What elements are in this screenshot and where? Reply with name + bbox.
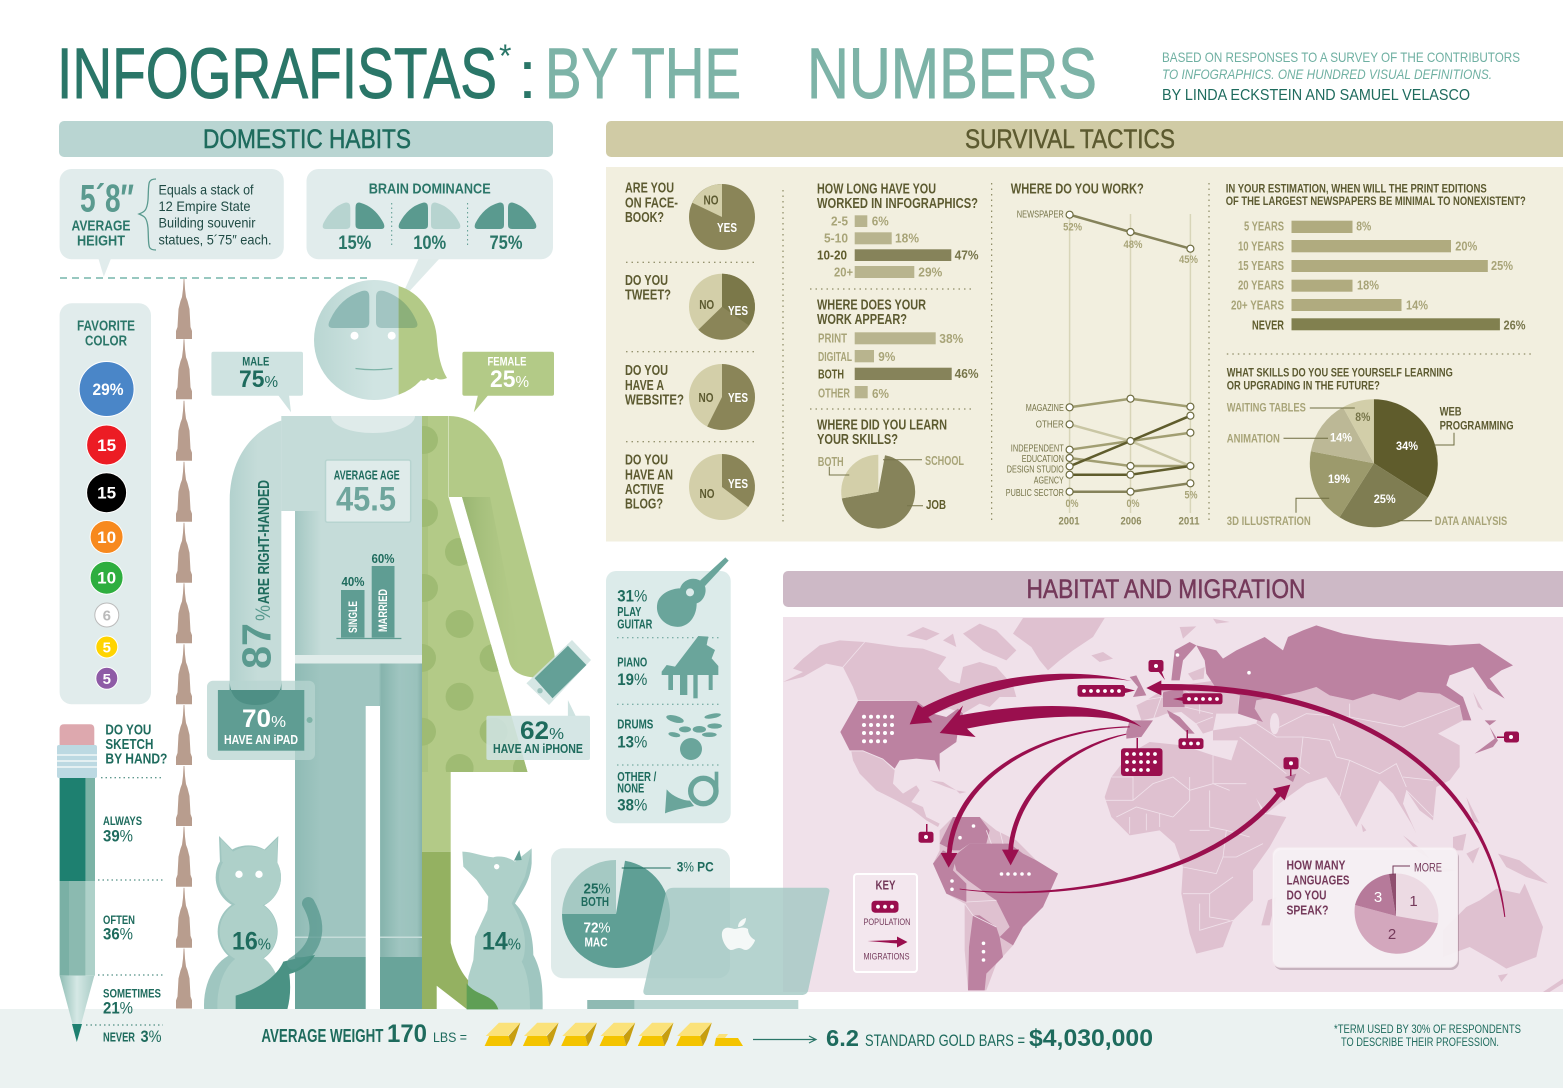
highlighted countries: [840, 625, 1513, 990]
bar chart: where work appears: BOTH: [818, 368, 844, 382]
question: website: DO YOU: [625, 363, 668, 379]
map key: POPULATION: [864, 917, 911, 928]
heading: domestic habits: [59, 121, 553, 157]
heading: domestic habits: DOMESTIC HABITS: [203, 124, 411, 154]
title: *: [499, 38, 511, 74]
height dashed line: [60, 277, 370, 279]
panel: height: [60, 169, 284, 277]
pie chart: future skills: WHAT SKILLS DO YOU SEE YOURSELF LEARNING: [1227, 366, 1453, 380]
panel: favorite color: 15: [97, 484, 116, 503]
inset: languages: SPEAK?: [1286, 903, 1329, 918]
iPhone: 62%: [520, 717, 564, 745]
footnote: *TERM USED BY 30% OF RESPONDENTS: [1334, 1024, 1521, 1036]
subtitle and byline: BY LINDA ECKSTEIN AND SAMUEL VELASCO: [1162, 87, 1470, 104]
bar chart: print editions: 8%: [1356, 219, 1371, 233]
female leg: [422, 772, 498, 1009]
panel: favorite color: 5: [103, 640, 111, 656]
shirt shadow: [295, 511, 321, 655]
line chart: where do you work: DESIGN STUDIO: [1007, 465, 1064, 476]
bar chart: where work appears: 9%: [878, 349, 896, 364]
neckline: [331, 416, 415, 433]
bar chart: years in infographics: 20+: [834, 264, 853, 280]
iPad: [207, 680, 315, 760]
pie chart: where skills learned: WHERE DID YOU LEARN: [817, 417, 947, 433]
cat front: [218, 839, 281, 1009]
weight in gold bars: AVERAGE WEIGHT: [261, 1026, 383, 1046]
arm gap: [281, 511, 295, 681]
panel: favorite color: 10: [97, 528, 116, 547]
inset: languages: 3: [1374, 889, 1382, 906]
question: facebook: [625, 181, 755, 250]
panel: height: 12 Empire State: [158, 198, 251, 214]
panel: survival tactics: [606, 167, 1563, 542]
inset: languages: [1272, 847, 1459, 970]
pencil: sketch by hand: [57, 721, 167, 1046]
panel: favorite color: COLOR: [85, 333, 127, 349]
arrow: [753, 1036, 816, 1043]
question: blog: NO: [700, 486, 714, 501]
marker: Japan: [1497, 732, 1519, 742]
pie chart: where skills learned: YOUR SKILLS?: [817, 432, 898, 448]
bar chart: print editions: 20+ YEARS: [1231, 298, 1284, 312]
pencil: sketch by hand: DO YOU: [105, 721, 151, 738]
bar chart: where work appears: DIGITAL: [818, 350, 852, 364]
female arm: [449, 416, 555, 678]
pencil: sketch by hand: BY HAND?: [105, 751, 167, 768]
icon: french horn: [665, 772, 718, 813]
line chart: where do you work: 0%: [1066, 498, 1079, 510]
bar chart: print editions: 26%: [1504, 318, 1526, 332]
bar chart: print editions: 14%: [1406, 298, 1428, 312]
question: website: YES: [728, 390, 748, 405]
panel: favorite color: 5: [103, 671, 111, 688]
text: right-handed: 87: [234, 623, 280, 669]
bar chart: years in infographics: 10-20: [817, 248, 847, 262]
bar chart: where work appears: OTHER: [818, 386, 850, 400]
bar chart: married status: SINGLE: [346, 601, 360, 633]
panel: mac vs pc: 25%: [584, 880, 610, 897]
weight in gold bars: LBS =: [433, 1030, 467, 1045]
icon: guitar: [657, 557, 729, 627]
panel: height: Building souvenir: [158, 215, 256, 231]
question: website: WEBSITE?: [625, 393, 684, 409]
icon: drums: [665, 712, 722, 760]
callout: average age: 45.5: [336, 481, 396, 519]
pie chart: future skills: 25%: [1374, 492, 1396, 506]
bar chart: print editions: NEVER: [1252, 318, 1284, 332]
question: facebook: BOOK?: [625, 210, 664, 226]
heading: survival tactics: [606, 121, 1563, 157]
question: facebook: ARE YOU: [625, 181, 674, 197]
bar chart: print editions: IN YOUR ESTIMATION, WHEN WILL THE PRINT EDITIONS: [1226, 181, 1487, 195]
bar chart: years in infographics: 6%: [872, 214, 889, 228]
bar chart: print editions: 18%: [1357, 279, 1379, 293]
polka dots: [422, 426, 528, 772]
bar chart: years in infographics: 18%: [895, 230, 919, 246]
panel: brain dominance: 10%: [413, 233, 446, 254]
pie chart: future skills: DATA ANALYSIS: [1435, 514, 1507, 528]
panel: instruments: NONE: [617, 781, 644, 795]
bar chart: print editions: 10 YEARS: [1238, 239, 1284, 253]
population dots on countries: [862, 653, 1251, 962]
pie chart: where skills learned: JOB: [926, 498, 946, 512]
subtitle and byline: TO INFOGRAPHICS. ONE HUNDRED VISUAL DEFINITIONS.: [1162, 66, 1492, 82]
panel: favorite color: 29%: [92, 380, 124, 399]
inset: languages: MORE: [1414, 861, 1442, 875]
male pants: [295, 664, 422, 1009]
pie chart: where skills learned: [817, 417, 964, 529]
bar chart: print editions: 20%: [1455, 239, 1477, 253]
bar chart: married status: 40%: [342, 575, 364, 589]
map land: [783, 618, 1563, 992]
line chart: where do you work: OTHER: [1036, 419, 1064, 430]
line chart: where do you work: [1006, 181, 1200, 528]
marker: Italy: [1178, 730, 1204, 749]
question: blog: [625, 452, 755, 520]
line chart: where do you work: EDUCATION: [1022, 454, 1064, 465]
question: website: HAVE A: [625, 378, 664, 394]
bottom band: [0, 1009, 1563, 1088]
dog: [462, 848, 543, 1009]
pencil: sketch by hand: OFTEN: [103, 913, 135, 927]
question: facebook: NO: [704, 192, 718, 208]
bar chart: years in infographics: 5-10: [824, 230, 848, 246]
panel: instruments: DRUMS: [617, 717, 653, 731]
line chart: where do you work: 2011: [1178, 516, 1200, 528]
inset: languages: DO YOU: [1286, 887, 1326, 902]
iPhone: HAVE AN iPHONE: [493, 741, 583, 756]
pie chart: future skills: WEB: [1440, 405, 1462, 419]
panel: instruments: 31%: [617, 587, 647, 606]
question: facebook: YES: [717, 220, 737, 235]
map key: KEY: [876, 878, 896, 892]
map markers: [862, 653, 1519, 962]
inland sea: [1225, 718, 1255, 726]
callout: female: [462, 352, 554, 412]
arm shadow: [462, 497, 525, 676]
panel: instruments: PIANO: [617, 656, 648, 670]
cat: [204, 836, 322, 1009]
bar chart: where work appears: 38%: [939, 331, 964, 346]
iPhone: [486, 640, 591, 760]
heading: habitat and migration: HABITAT AND MIGRATION: [1026, 574, 1306, 604]
dotted separators: [626, 183, 1531, 522]
weight in gold bars: [261, 1020, 1153, 1052]
weight in gold bars: $4,030,000: [1029, 1025, 1153, 1052]
male arm: [230, 416, 310, 705]
title: BY THE: [545, 35, 741, 114]
callout: male: MALE: [242, 355, 269, 369]
bar chart: print editions: 20 YEARS: [1238, 279, 1284, 293]
bar chart: years in infographics: WORKED IN INFOGRAPHICS?: [817, 196, 978, 212]
icon: apple logo: [722, 918, 755, 950]
panel: height: 5´8″: [80, 178, 134, 221]
panel: mac vs pc: 3% PC: [677, 859, 714, 875]
panel: brain dominance: 75%: [490, 233, 523, 254]
line chart: where do you work: INDEPENDENT: [1011, 443, 1064, 454]
question: tweet: [625, 273, 755, 340]
question: blog: BLOG?: [625, 497, 663, 513]
inset: languages: 2: [1388, 926, 1396, 943]
pie chart: future skills: WAITING TABLES: [1227, 401, 1306, 415]
weight in gold bars: 6.2: [826, 1025, 859, 1051]
panel: favorite color: 15: [97, 436, 116, 455]
line chart: where do you work: NEWSPAPER: [1017, 210, 1064, 220]
line chart: where do you work: MAGAZINE: [1026, 403, 1064, 414]
pie chart: where skills learned: BOTH: [818, 455, 844, 469]
icon: piano: [662, 636, 718, 698]
question: blog: HAVE AN: [625, 467, 673, 483]
panel: brain dominance: BRAIN DOMINANCE: [369, 180, 491, 197]
pie chart: future skills: PROGRAMMING: [1440, 418, 1514, 432]
marker: Spain: [1121, 738, 1162, 776]
country borders: [843, 642, 1460, 930]
line chart: where do you work: 48%: [1124, 239, 1143, 251]
iPad: HAVE AN iPAD: [224, 732, 298, 747]
pencil: sketch by hand: 39%: [103, 827, 133, 846]
bar chart: where work appears: PRINT: [818, 332, 847, 346]
callout: male: [211, 352, 303, 412]
line chart: where do you work: WHERE DO YOU WORK?: [1011, 181, 1144, 197]
heading: habitat and migration: [783, 571, 1563, 607]
question: website: NO: [698, 390, 714, 405]
panel: instruments: GUITAR: [617, 617, 652, 631]
bar chart: years in infographics: 47%: [955, 248, 979, 262]
question: facebook: ON FACE-: [625, 195, 678, 211]
title: :: [518, 37, 537, 113]
bar chart: married status: MARRIED: [376, 589, 390, 632]
panel: favorite color: FAVORITE: [77, 319, 135, 335]
pencil: sketch by hand: 3%: [140, 1027, 162, 1046]
callout: average age: AVERAGE AGE: [334, 468, 400, 482]
dog: 14%: [482, 928, 521, 956]
bar chart: where work appears: 46%: [955, 366, 979, 381]
title: INFOGRAFISTAS: [57, 35, 497, 114]
pencil: sketch by hand: 21%: [103, 998, 133, 1017]
map key: [854, 874, 917, 972]
question: tweet: DO YOU: [625, 273, 668, 289]
panel: brain dominance: [306, 169, 553, 303]
line chart: where do you work: AGENCY: [1034, 475, 1064, 486]
bar chart: print editions: 25%: [1491, 259, 1513, 273]
statues of empire state building: [176, 279, 192, 1008]
footnote: [1334, 1024, 1521, 1049]
pencil: sketch by hand: ALWAYS: [103, 814, 142, 828]
weight in gold bars: STANDARD GOLD BARS =: [865, 1032, 1025, 1050]
map key: MIGRATIONS: [864, 952, 910, 962]
text: right-handed: %: [252, 605, 275, 621]
bar chart: where work appears: [817, 297, 979, 401]
line chart: where do you work: 2001: [1058, 516, 1080, 528]
pie chart: future skills: 34%: [1396, 439, 1418, 453]
question: tweet: NO: [699, 297, 714, 312]
panel: height: HEIGHT: [77, 232, 125, 249]
panel: height: statues, 5´75″ each.: [158, 231, 272, 247]
question: blog: DO YOU: [625, 452, 668, 468]
footnote: TO DESCRIBE THEIR PROFESSION.: [1341, 1037, 1499, 1049]
bar chart: where work appears: WORK APPEAR?: [817, 312, 907, 328]
heading: survival tactics: SURVIVAL TACTICS: [965, 124, 1175, 154]
panel: height: AVERAGE: [72, 218, 130, 235]
panel: mac vs pc: [551, 848, 730, 978]
panel: instruments: 19%: [617, 670, 647, 689]
pencil: sketch by hand: NEVER: [103, 1031, 135, 1045]
head: [314, 280, 447, 400]
panel: favorite color: 6: [103, 608, 111, 624]
inset: languages: 1: [1409, 893, 1418, 910]
cat silhouette: [204, 836, 281, 1009]
question: tweet: TWEET?: [625, 288, 671, 304]
panel: mac vs pc: 72%: [584, 920, 610, 937]
bar chart: where work appears: 6%: [872, 386, 889, 401]
question: tweet: YES: [728, 303, 748, 318]
line chart: where do you work: 5%: [1184, 490, 1198, 502]
panel: instruments: 38%: [617, 796, 647, 815]
panel: mac vs pc: MAC: [584, 935, 608, 950]
laptop: [587, 888, 830, 1009]
pie chart: future skills: 14%: [1330, 430, 1352, 444]
panel: favorite color: [60, 303, 151, 704]
inset: languages: LANGUAGES: [1286, 872, 1350, 887]
bar chart: years in infographics: 29%: [918, 264, 943, 280]
bar chart: print editions: [1226, 181, 1526, 332]
question: blog: YES: [728, 476, 748, 491]
title: [57, 35, 1097, 114]
text: right-handed: ARE RIGHT-HANDED: [256, 480, 273, 604]
bar chart: years in infographics: 2-5: [831, 214, 848, 228]
marker: UK: [1078, 685, 1135, 697]
belt: [295, 655, 422, 664]
panel: instruments: OTHER /: [617, 770, 657, 784]
bar chart: where work appears: WHERE DOES YOUR: [817, 297, 926, 313]
pie chart: future skills: [1227, 366, 1514, 528]
panel: height: Equals a stack of: [158, 181, 254, 197]
pencil: sketch by hand: SKETCH: [105, 736, 153, 753]
male shirt: [281, 416, 422, 655]
female dress: [422, 416, 528, 772]
panel: favorite color: 10: [97, 569, 116, 588]
pencil: sketch by hand: SOMETIMES: [103, 986, 161, 1000]
callout: average age: [326, 460, 411, 522]
subtitle and byline: [1162, 49, 1520, 104]
pie chart: future skills: OR UPGRADING IN THE FUTURE?: [1227, 378, 1380, 392]
text: right-handed: [234, 480, 280, 669]
marker: Arabia: [1284, 757, 1298, 776]
panel: instruments: [606, 557, 731, 823]
bar chart: married status: [336, 552, 401, 638]
icon: gold bars: [485, 1023, 743, 1046]
title: NUMBERS: [807, 35, 1097, 114]
panel: brain dominance: 15%: [338, 233, 371, 254]
marker: Norway: [1148, 660, 1165, 680]
line chart: where do you work: 2006: [1120, 516, 1142, 528]
bar chart: married status: 60%: [372, 552, 394, 566]
pie chart: future skills: 8%: [1355, 410, 1371, 424]
panel: instruments: PLAY: [617, 605, 642, 619]
figure: person: [207, 280, 591, 1009]
pie chart: future skills: 19%: [1328, 472, 1350, 486]
iPad: 70%: [242, 705, 286, 733]
cat tail: [236, 955, 315, 1009]
line chart: where do you work: 52%: [1063, 222, 1082, 234]
callout: male: 75%: [239, 366, 278, 393]
bar chart: years in infographics: HOW LONG HAVE YOU: [817, 181, 936, 197]
callout: female: FEMALE: [488, 355, 526, 369]
callout: female: 25%: [490, 366, 529, 393]
marker: Panama: [918, 824, 934, 843]
bar chart: print editions: 5 YEARS: [1244, 219, 1284, 233]
panel: instruments: 13%: [617, 733, 647, 752]
cat: 16%: [232, 928, 271, 956]
pie chart: where skills learned: SCHOOL: [925, 454, 964, 468]
weight in gold bars: 170: [387, 1020, 427, 1048]
panel: world map: [783, 617, 1563, 992]
line chart: where do you work: PUBLIC SECTOR: [1006, 488, 1064, 499]
question: blog: ACTIVE: [625, 482, 664, 498]
question: website: [625, 363, 755, 430]
pie chart: future skills: 3D ILLUSTRATION: [1227, 514, 1311, 528]
bar chart: print editions: 15 YEARS: [1238, 259, 1284, 273]
pie chart: future skills: ANIMATION: [1227, 431, 1280, 445]
line chart: where do you work: 45%: [1179, 254, 1198, 266]
pencil: sketch by hand: 36%: [103, 924, 133, 943]
panel: mac vs pc: BOTH: [581, 894, 609, 909]
inset: languages: HOW MANY: [1286, 857, 1346, 872]
continents: light countries: [783, 618, 1563, 992]
bar chart: years in infographics: [817, 181, 979, 280]
marker: Germany: [1173, 693, 1222, 704]
line chart: where do you work: 0%: [1126, 498, 1140, 510]
migration arrows: [910, 674, 1505, 917]
